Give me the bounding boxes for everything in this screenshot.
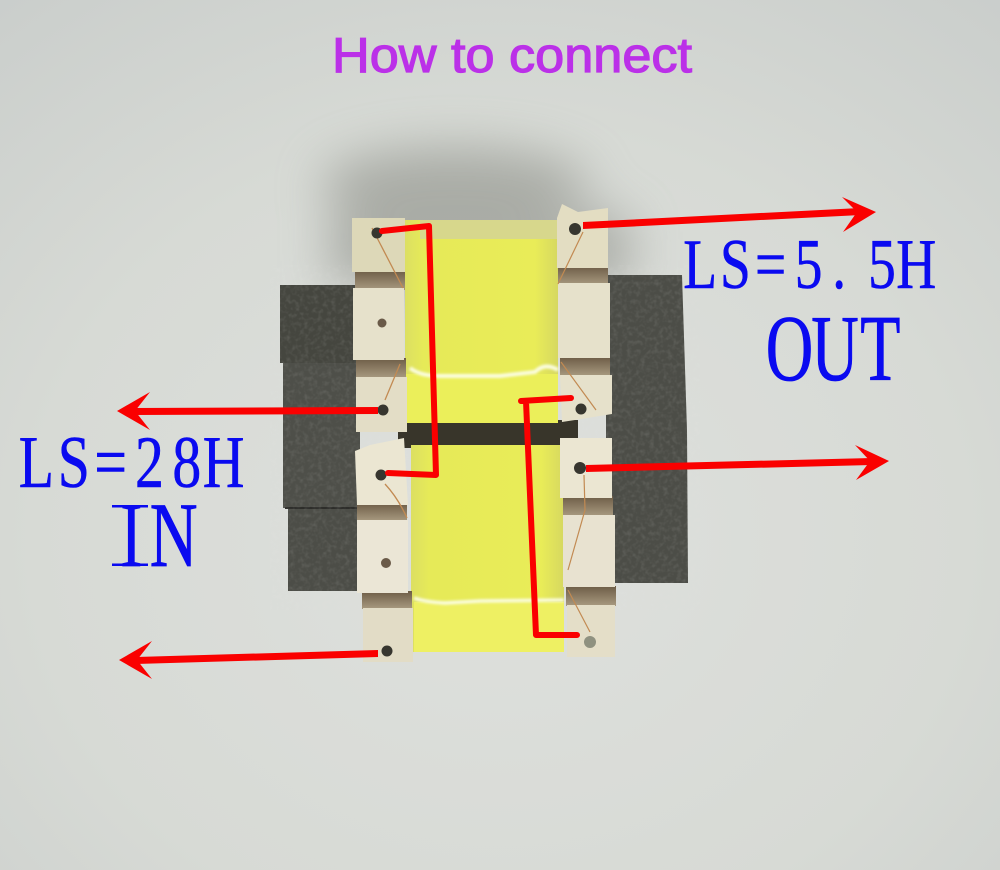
title: How to connect (332, 29, 692, 83)
arrow: output bottom (586, 445, 889, 480)
arrow: input top (117, 392, 378, 430)
label: IN: IN (120, 486, 198, 587)
label: LS=5.5H: LS=5.5H (683, 224, 936, 304)
link: top-right coil end to lower-right pin (521, 398, 577, 635)
top-left bobbin (352, 218, 407, 432)
top-right bobbin (557, 204, 612, 422)
red wire links (382, 226, 577, 635)
solder pins (372, 223, 596, 656)
transformer photo (280, 204, 688, 662)
bottom-right bobbin (560, 438, 616, 657)
link: top-left pin to lower-left pin (382, 226, 436, 475)
bottom-left bobbin (355, 438, 413, 662)
right iron core (606, 275, 688, 583)
arrow: input bottom (119, 641, 378, 679)
bottom coil (411, 445, 564, 652)
shadow behind transformer (320, 147, 630, 285)
left iron core (280, 285, 362, 591)
arrow: output top (583, 197, 876, 232)
core texture (280, 275, 688, 591)
label: LS=28H: LS=28H (19, 422, 244, 504)
dark gap between coils (398, 420, 578, 448)
top coil (405, 220, 558, 423)
label: OUT: OUT (766, 297, 900, 401)
